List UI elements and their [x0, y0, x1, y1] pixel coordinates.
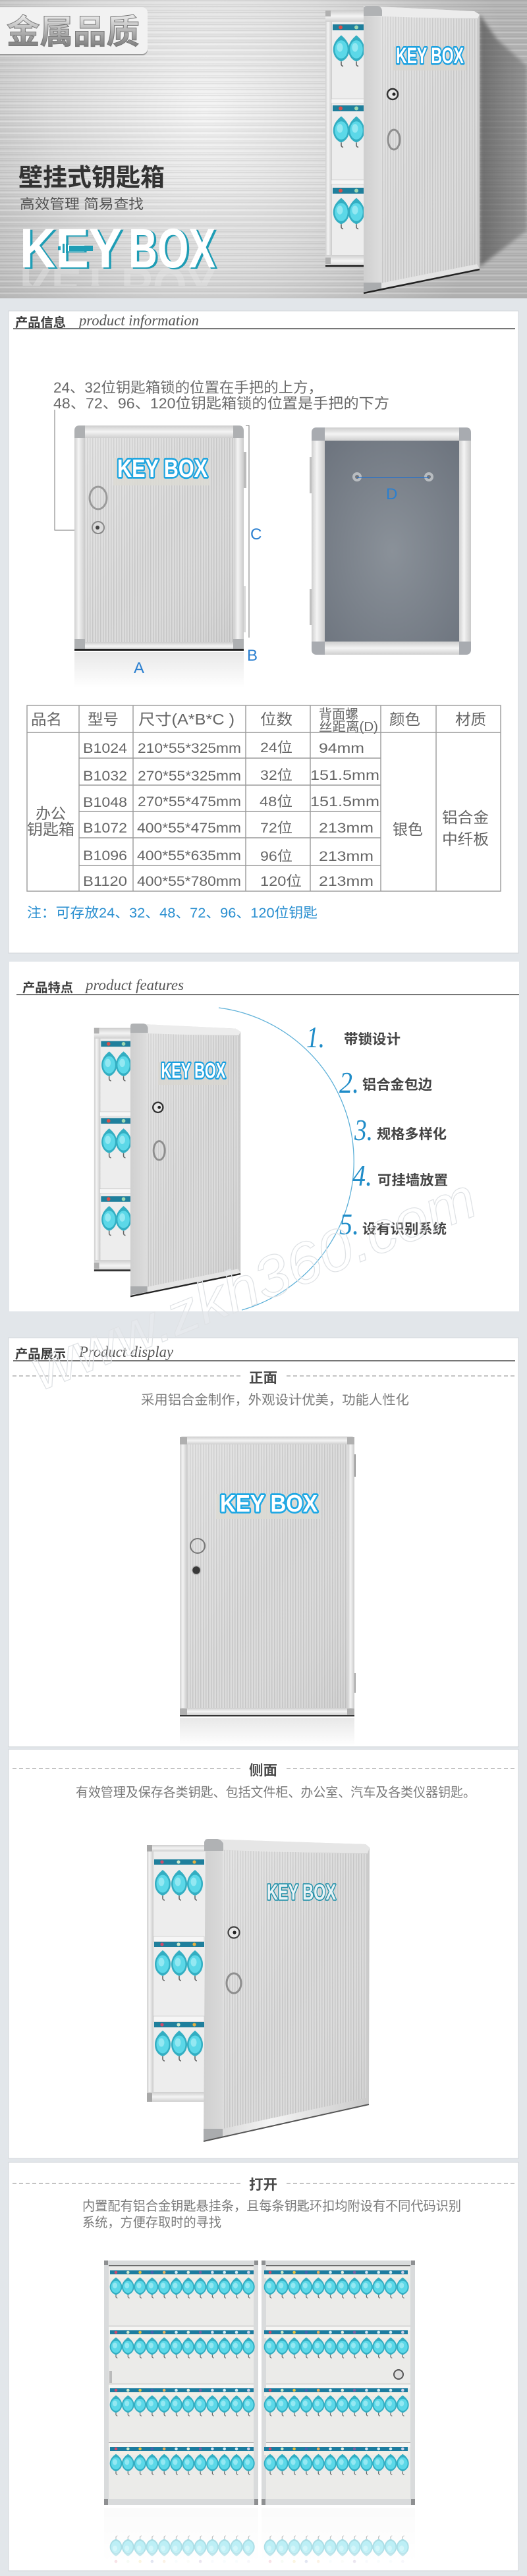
heading: product information: product information	[78, 312, 199, 329]
feature 4: 可挂墙放置	[377, 1173, 448, 1188]
front view box	[74, 425, 246, 651]
feature 3: 3.	[354, 1113, 373, 1147]
section title: side: 侧面	[249, 1763, 277, 1778]
heading: product features	[16, 977, 519, 995]
dimension label B: B	[247, 647, 258, 665]
front view box: KEY BOX	[117, 455, 208, 483]
open cabinet, right door	[262, 2261, 415, 2505]
panel: product information	[9, 311, 518, 953]
lock position note: 48、72、96、120位钥匙箱锁的位置是手把的下方	[53, 395, 389, 412]
specification table: 213mm	[319, 821, 374, 836]
front cabinet reflection	[180, 1718, 354, 1746]
back view box	[310, 427, 471, 655]
specification table: 120位	[260, 874, 302, 889]
feature 2	[339, 1066, 432, 1099]
hero banner	[0, 0, 527, 318]
KEY BOX logo: BOX	[128, 217, 215, 279]
side view open cabinet: KEY BOX	[267, 1880, 336, 1904]
specification table: 24位	[260, 740, 292, 755]
panel: side view	[9, 1749, 518, 2158]
feature 5: 5.	[339, 1207, 359, 1241]
feature 1: 带锁设计	[344, 1032, 401, 1047]
heading: product display: Product display	[78, 1344, 174, 1360]
specification table: 钥匙箱	[27, 821, 74, 838]
specification table: 151.5mm	[310, 794, 379, 809]
specification table: B1096	[83, 848, 127, 863]
specification table: 96位	[260, 849, 292, 864]
specification table: 210*55*325mm	[138, 741, 241, 756]
watermark: www.zkh360.com	[21, 1165, 485, 1403]
specification table: 型号	[88, 711, 119, 728]
KEY BOX logo: KEY BOX	[20, 256, 216, 318]
specification table: 办公	[36, 805, 66, 822]
feature 2: 铝合金包边	[362, 1077, 432, 1093]
KEY BOX logo: BOX	[130, 219, 217, 281]
dimension label D: D	[386, 485, 397, 503]
specification table: 400*55*780mm	[137, 874, 241, 889]
heading: product features: 产品特点	[22, 981, 73, 995]
heading: product features: product features	[84, 977, 184, 993]
feature 5	[339, 1207, 447, 1241]
specification table: 72位	[260, 821, 292, 836]
specification table: 270*55*475mm	[138, 794, 241, 809]
panel: product display, front view	[9, 1338, 518, 1747]
specification table: B1120	[83, 874, 127, 889]
lock position note	[53, 379, 389, 412]
lock position note: 24、32位钥匙箱锁的位置在手把的上方，	[53, 379, 323, 396]
feature 4: 4.	[352, 1159, 372, 1192]
specification table: 48位	[260, 794, 292, 809]
feature 4	[352, 1159, 448, 1192]
badge: metal quality: 金属品质	[7, 13, 140, 51]
front description: 采用铝合金制作，外观设计优美，功能人性化	[141, 1392, 409, 1408]
section title: front: 正面	[249, 1371, 277, 1386]
specification table: 213mm	[319, 874, 374, 889]
capacity note: 注：可存放24、32、48、72、96、120位钥匙	[27, 906, 318, 921]
specification table: 151.5mm	[310, 768, 379, 783]
specification table: 丝距离(D)	[319, 719, 378, 734]
heading: product information: 产品信息	[15, 315, 66, 330]
dimension bracket C	[246, 425, 249, 638]
cabinet half open	[325, 6, 480, 293]
side description: 有效管理及保存各类钥匙、包括文件柜、办公室、汽车及各类仪器钥匙。	[76, 1785, 476, 1800]
heading: product display	[13, 1344, 515, 1361]
panel: open view	[9, 2162, 518, 2571]
open description: 系统，方便存取时的寻找	[82, 2215, 221, 2230]
feature 2: 2.	[339, 1066, 359, 1099]
specification table: 400*55*635mm	[137, 848, 241, 863]
specification table: 尺寸(A*B*C )	[138, 711, 235, 728]
specification table: 位数	[260, 711, 292, 728]
open cabinet, left door	[104, 2261, 258, 2505]
specification table: B1072	[83, 821, 127, 836]
leader line to lock	[55, 410, 92, 530]
heading: product information	[13, 312, 515, 330]
front view cabinet: KEY BOX	[220, 1490, 318, 1517]
KEY BOX logo: KEY	[20, 217, 122, 279]
feature 1	[306, 1020, 401, 1054]
open description	[82, 2199, 461, 2230]
feature 5: 设有识别系统	[362, 1221, 447, 1237]
decorative arc	[219, 1008, 354, 1310]
specification table: B1048	[83, 795, 127, 810]
feature 1: 1.	[306, 1020, 325, 1054]
specification table: 94mm	[319, 741, 364, 756]
dimension label C: C	[250, 526, 262, 543]
feature 3: 规格多样化	[377, 1127, 447, 1142]
specification table: B1024	[83, 741, 127, 756]
panel: product features	[9, 962, 519, 1311]
open cabinet	[94, 1024, 240, 1296]
KEY BOX logo	[22, 229, 217, 286]
specification table: 品名	[31, 711, 62, 728]
specification table: 银色	[393, 821, 423, 838]
front box reflection	[74, 652, 244, 688]
specification table: 背面螺	[319, 707, 358, 722]
hero title: 壁挂式钥匙箱	[18, 164, 165, 191]
heading: product display: 产品展示	[15, 1347, 66, 1361]
specification table: 32位	[260, 768, 292, 783]
specification table: 213mm	[319, 849, 374, 864]
feature 3	[354, 1113, 447, 1147]
specification table: 270*55*325mm	[138, 769, 241, 784]
open cabinet reflection	[99, 2507, 422, 2569]
specification table: 材质	[455, 711, 486, 728]
KEY BOX logo: KEY	[22, 219, 124, 281]
specification table	[27, 705, 501, 891]
side view open cabinet	[147, 1839, 370, 2141]
dimension label A: A	[134, 659, 144, 677]
specification table: B1032	[83, 769, 127, 784]
front view cabinet	[180, 1437, 356, 1716]
section title: open: 打开	[249, 2178, 277, 2193]
open description: 内置配有铝合金钥匙悬挂条，且每条钥匙环扣均附设有不同代码识别	[82, 2199, 461, 2214]
specification table: 铝合金	[442, 809, 489, 826]
specification table: 中纤板	[442, 831, 489, 848]
specification table: 颜色	[389, 711, 420, 728]
specification table: 400*55*475mm	[137, 821, 241, 836]
hero subtitle: 高效管理 简易查找	[20, 197, 144, 212]
